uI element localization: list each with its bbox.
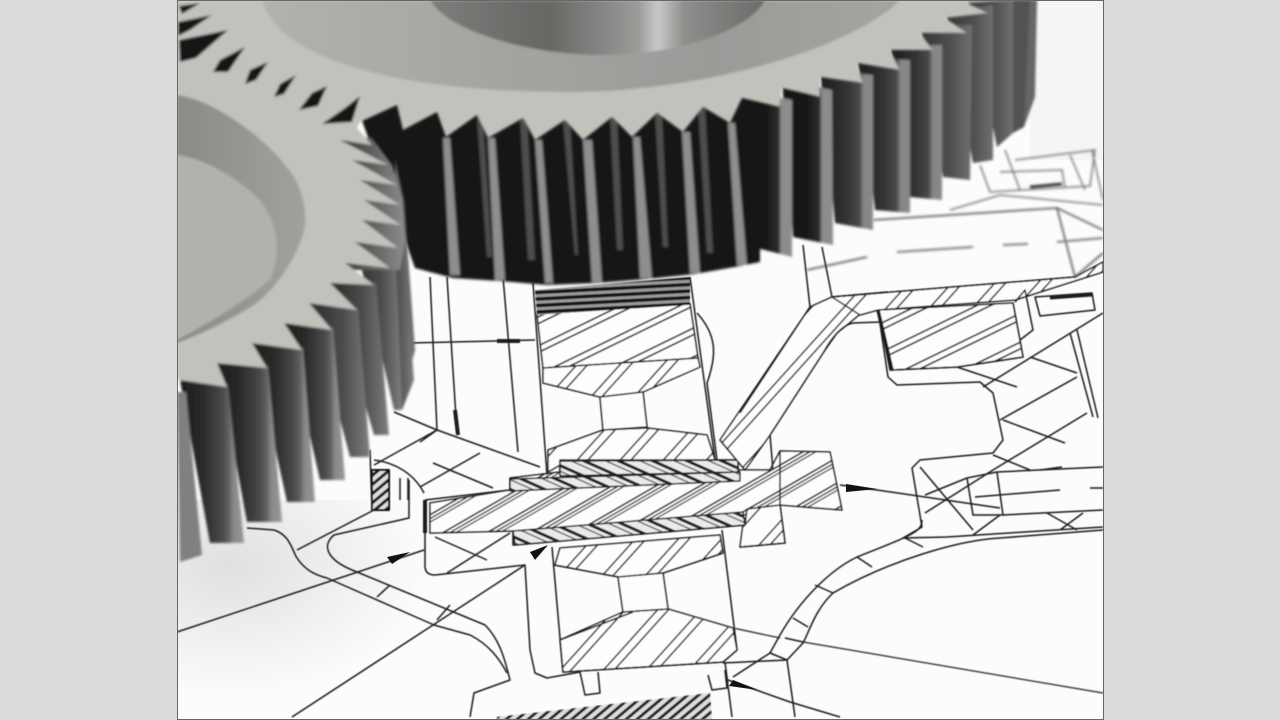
dense small block — [372, 470, 389, 510]
both gears: light rim surface — [177, 0, 1010, 387]
left gear: hub recess — [177, 95, 305, 343]
hatched section: lower block — [497, 535, 737, 720]
vertical lines above shaft — [430, 277, 717, 475]
curved paths bottom left — [328, 480, 510, 717]
left gear: tooth faces — [177, 160, 415, 562]
hatched section: under top block — [548, 428, 715, 472]
top gear: right tooth faces — [742, 0, 1037, 257]
top gear: hub recess — [262, 0, 900, 92]
photo frame — [178, 0, 1104, 720]
top gear — [360, 0, 1037, 285]
diagonal arm outlines — [740, 245, 1075, 470]
curved paths bottom right — [668, 609, 1103, 693]
upper drawing, out of focus — [807, 150, 1103, 277]
top gear: tooth ridges — [477, 107, 713, 260]
dimension arrows — [387, 484, 877, 690]
hatched section: diagonal arm — [720, 292, 887, 470]
centre shaft extra — [740, 451, 785, 547]
hatched section: right block — [832, 262, 1103, 370]
right bar — [967, 467, 1103, 515]
top gear: rim notches — [178, 3, 360, 124]
right cavity outline — [878, 310, 1003, 538]
top gear: dark tooth band — [360, 90, 760, 285]
technical drawing lines — [177, 245, 1103, 720]
hatched section: top block — [535, 277, 700, 430]
photo: gears on a technical drawing — [177, 0, 1104, 720]
left gear: tooth gaps behind the rim — [336, 135, 405, 270]
top gear: lit tooth edges — [443, 123, 747, 283]
left gear — [177, 0, 1010, 562]
hatched section: central shaft — [430, 451, 842, 547]
